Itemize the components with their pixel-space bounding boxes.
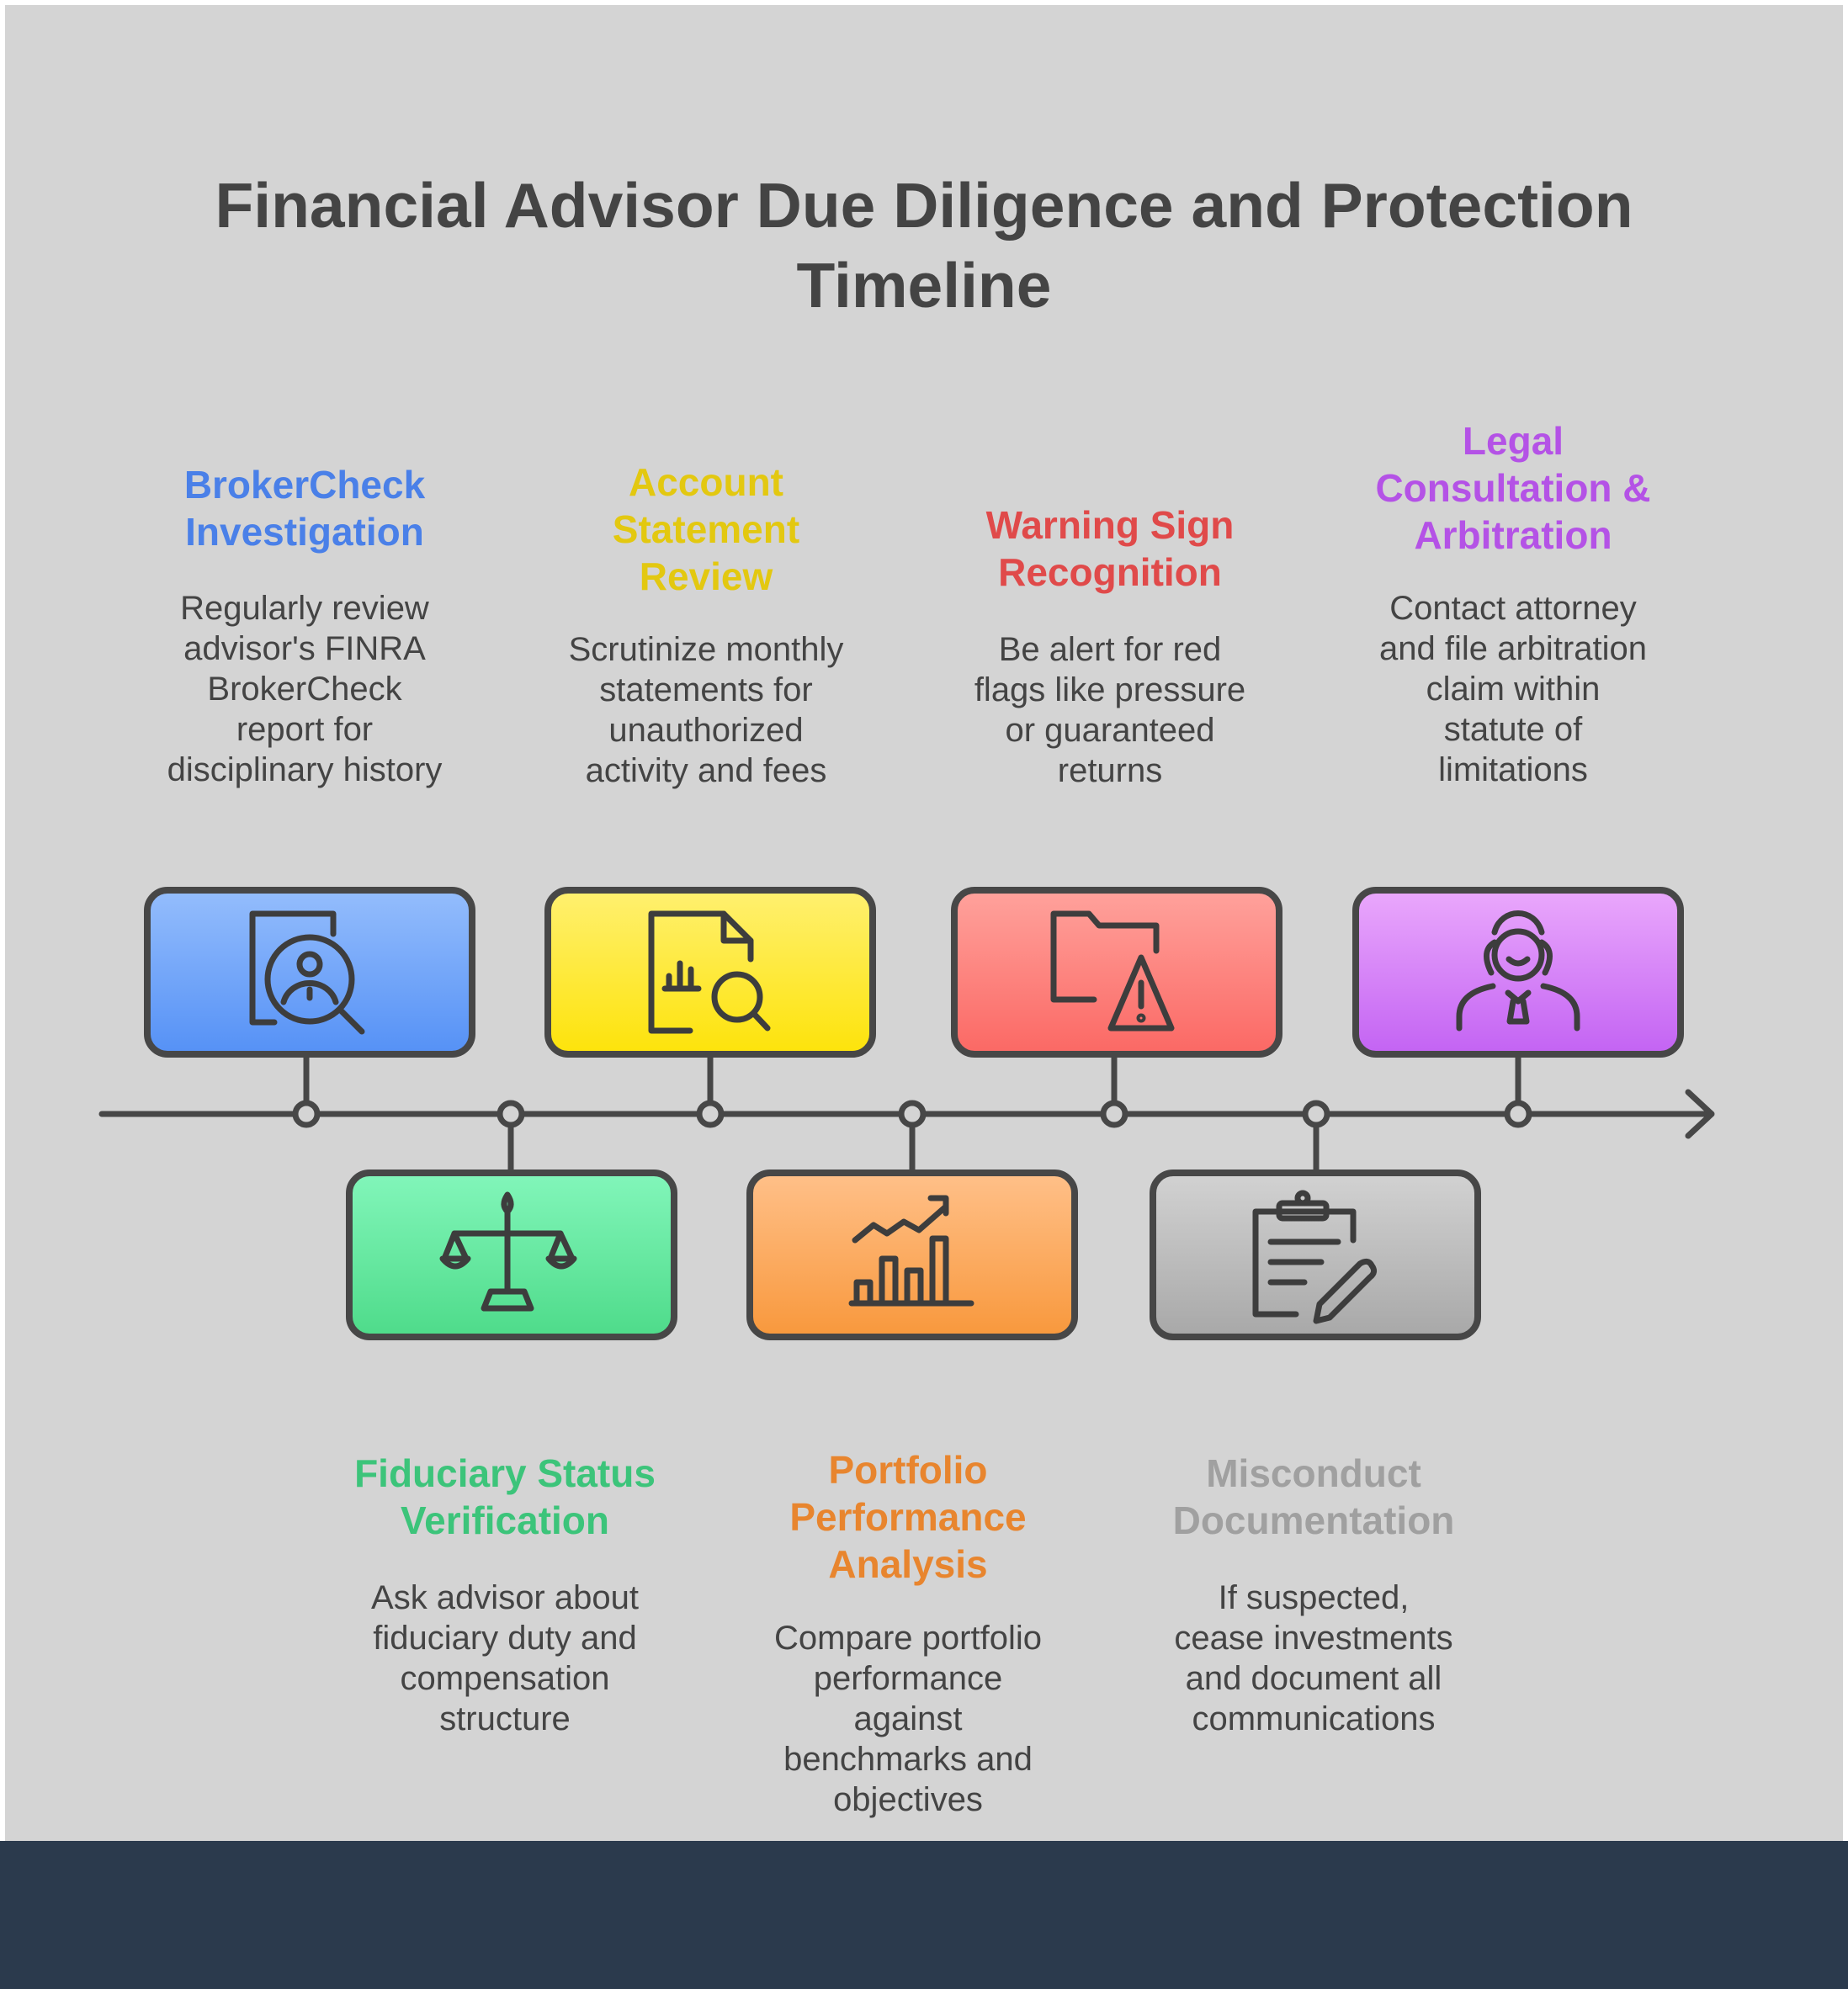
text: Portfolio: against [853, 1700, 962, 1737]
heading: Account: Review [640, 554, 773, 598]
title: Financial Advisor Due Diligence and Protection [215, 170, 1633, 241]
heading: Portfolio: Analysis [828, 1542, 988, 1586]
box: Legal [1356, 890, 1681, 1054]
heading: Legal: Legal [1463, 419, 1564, 463]
text: BrokerCheck: BrokerCheck [207, 671, 402, 708]
text: Account: unauthorized [608, 712, 804, 749]
text: Account: Scrutinize monthly [569, 631, 843, 668]
text: Misconduct: communications [1192, 1700, 1436, 1737]
box: BrokerCheck [147, 890, 472, 1054]
text: Fiduciary: Ask advisor about [371, 1579, 639, 1616]
text: Warning: Be alert for red [999, 631, 1221, 668]
text: BrokerCheck [167, 590, 443, 788]
heading: Fiduciary [354, 1451, 656, 1542]
text: Warning [974, 631, 1245, 789]
heading: Account: Statement [613, 507, 799, 551]
heading: Fiduciary: Verification [401, 1498, 609, 1542]
icon: document search person [252, 914, 362, 1032]
heading: BrokerCheck: BrokerCheck [184, 463, 425, 507]
text: Legal: claim within [1426, 671, 1600, 708]
text: Fiduciary [371, 1579, 639, 1737]
text: Misconduct: If suspected, [1219, 1579, 1409, 1616]
box: Warning [954, 890, 1279, 1054]
text: Portfolio: performance [814, 1660, 1002, 1697]
heading: BrokerCheck: Investigation [185, 510, 424, 554]
text: Misconduct: cease investments [1174, 1620, 1453, 1657]
icon: scales [443, 1195, 574, 1308]
text: Legal: and file arbitration [1379, 630, 1647, 667]
heading: Warning: Recognition [998, 550, 1222, 594]
box: Account [548, 890, 873, 1054]
connectors [306, 1056, 1518, 1173]
text: Portfolio: benchmarks and [783, 1741, 1033, 1778]
text: Legal: Contact attorney [1389, 590, 1637, 627]
timeline nodes [295, 1103, 1529, 1125]
text: Misconduct [1174, 1579, 1453, 1737]
heading: Portfolio: Performance [789, 1495, 1027, 1539]
heading: Misconduct: Documentation [1173, 1498, 1454, 1542]
text: Portfolio [774, 1620, 1042, 1818]
heading: Account: Account [629, 460, 783, 504]
heading: Fiduciary: Fiduciary Status [354, 1451, 656, 1495]
heading: Legal [1375, 419, 1651, 557]
text: Fiduciary: fiduciary duty and [373, 1620, 637, 1657]
text: BrokerCheck: disciplinary history [167, 751, 442, 788]
icon: clipboard edit [1256, 1193, 1374, 1321]
footer band [0, 1841, 1848, 1989]
heading: Legal: Consultation & [1375, 466, 1651, 510]
heading: Legal: Arbitration [1414, 513, 1612, 557]
heading: Misconduct: Misconduct [1206, 1451, 1421, 1495]
icon: lawyer [1459, 914, 1577, 1028]
box: Fiduciary [349, 1173, 674, 1337]
text: Legal: statute of [1444, 711, 1582, 748]
heading: Warning [986, 503, 1234, 594]
text: BrokerCheck: advisor's FINRA [183, 630, 426, 667]
text: BrokerCheck: Regularly review [180, 590, 429, 627]
box: Misconduct [1153, 1173, 1478, 1337]
heading: BrokerCheck [184, 463, 426, 554]
heading: Portfolio [789, 1448, 1027, 1586]
text: Warning: flags like pressure [974, 671, 1245, 708]
title: Timeline [797, 250, 1051, 321]
text: Warning: returns [1058, 752, 1162, 789]
heading: Portfolio: Portfolio [828, 1448, 988, 1492]
icon: growth chart [852, 1198, 971, 1303]
text: BrokerCheck: report for [236, 711, 373, 748]
heading: Misconduct [1173, 1451, 1454, 1542]
title [215, 170, 1633, 321]
heading: Account [613, 460, 799, 598]
heading: Warning: Warning Sign [986, 503, 1234, 547]
box: Portfolio [750, 1173, 1075, 1337]
text: Legal: limitations [1438, 751, 1588, 788]
icon: folder warning [1054, 914, 1171, 1028]
text: Misconduct: and document all [1186, 1660, 1442, 1697]
icon: statement analysis [651, 914, 767, 1031]
text: Account: statements for [599, 671, 813, 708]
text: Account: activity and fees [586, 752, 826, 789]
text: Portfolio: Compare portfolio [774, 1620, 1042, 1657]
text: Warning: or guaranteed [1005, 712, 1215, 749]
text: Portfolio: objectives [833, 1781, 983, 1818]
text: Fiduciary: structure [439, 1700, 571, 1737]
text: Fiduciary: compensation [400, 1660, 610, 1697]
text: Legal [1379, 590, 1647, 788]
text: Account [569, 631, 843, 789]
timeline axis arrow [102, 1092, 1712, 1136]
